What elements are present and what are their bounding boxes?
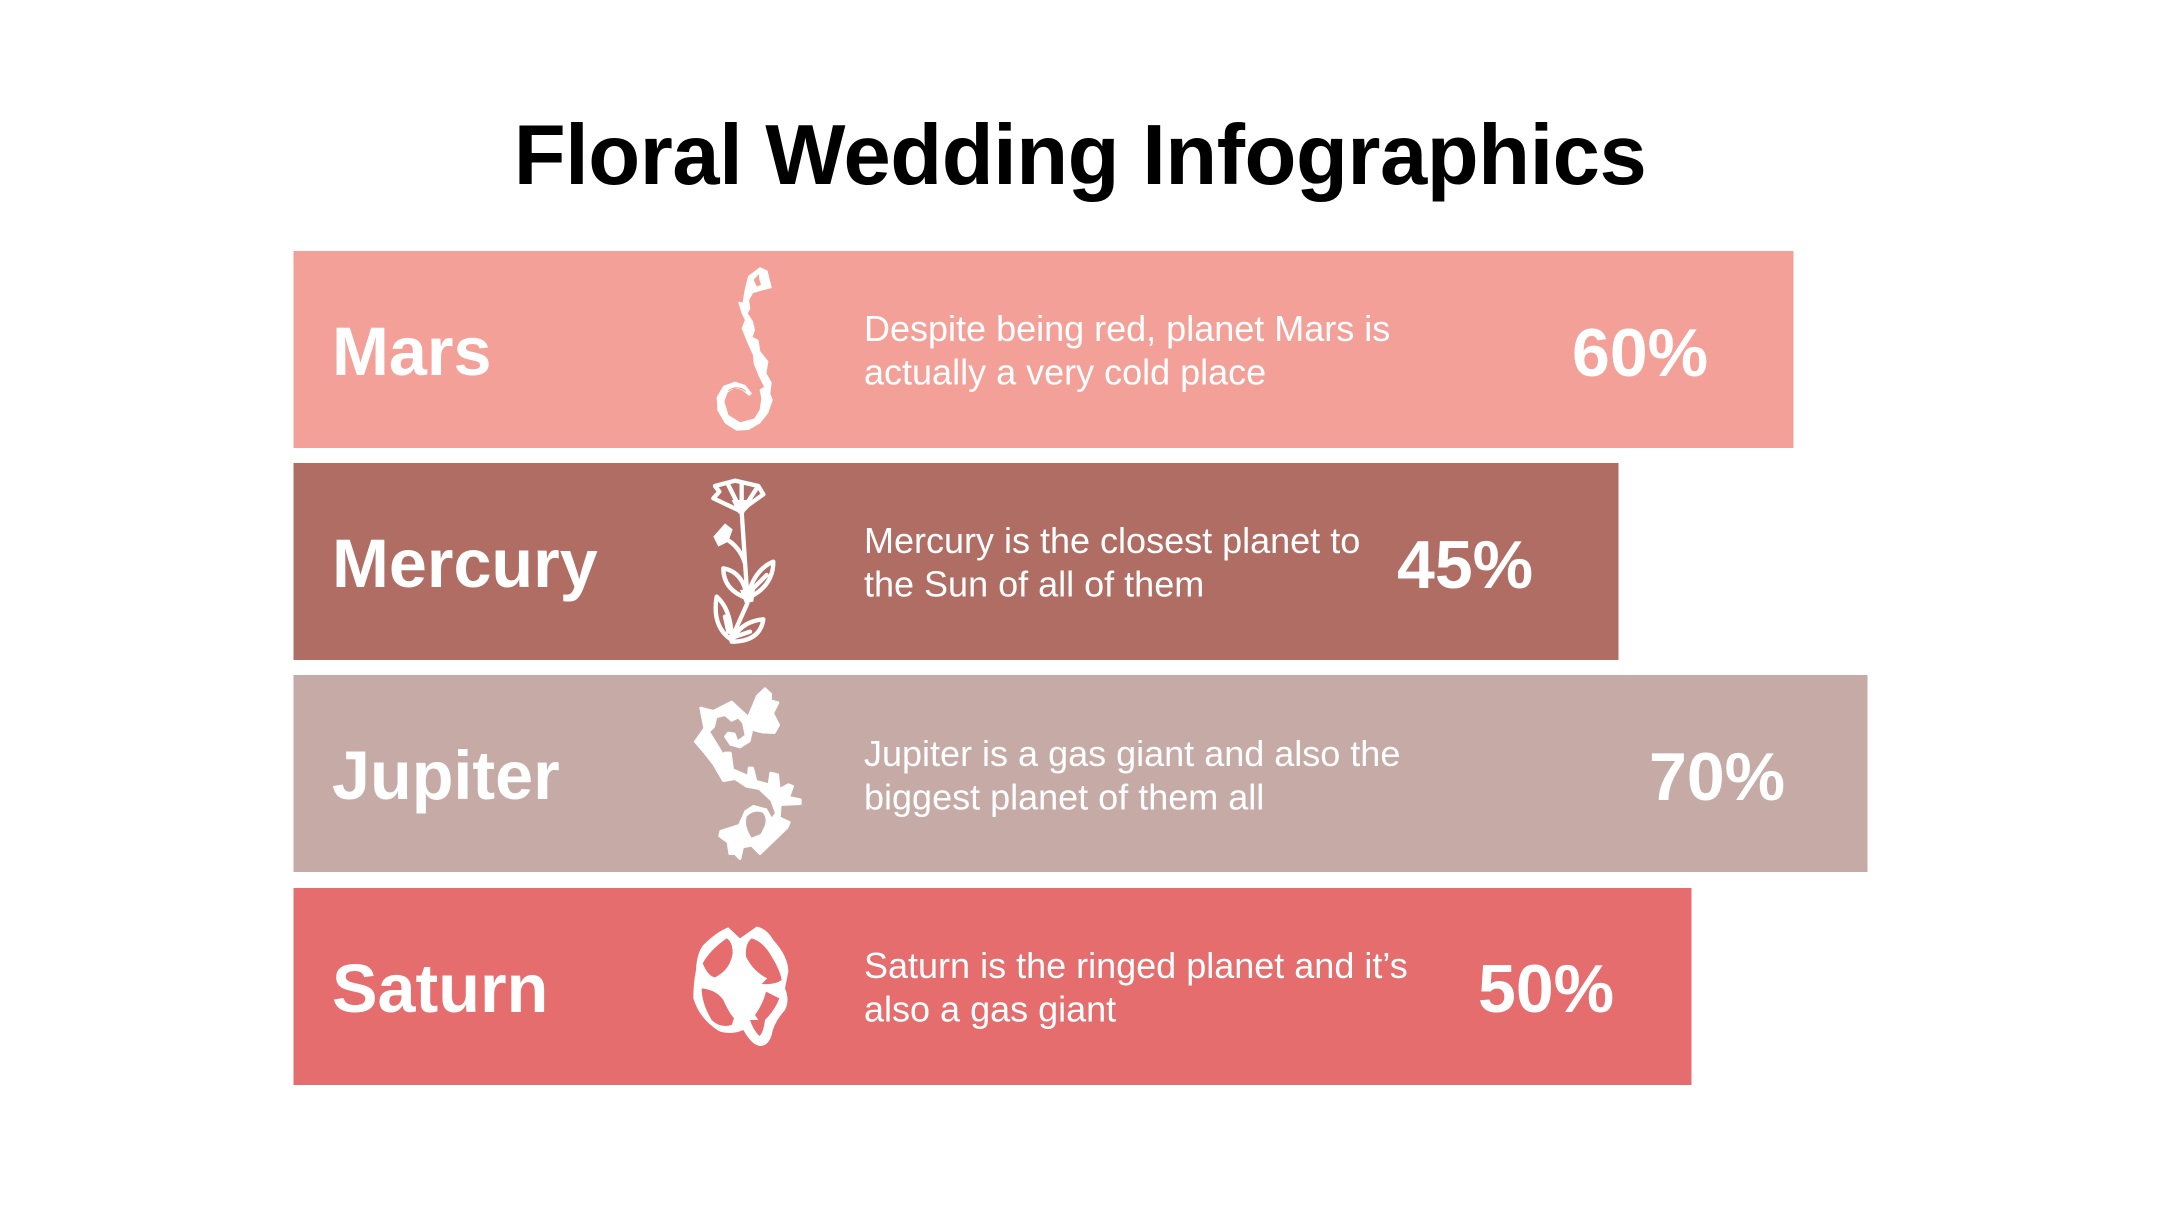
label: Mars: Mars	[332, 314, 491, 390]
description: Saturn: also a gas giant	[864, 988, 1116, 1030]
value: 60%: 60%	[1572, 315, 1708, 391]
description: Mercury: the Sun of all of them	[864, 564, 1204, 604]
value: 45%: 45%	[1397, 527, 1533, 603]
bar: Mars 60%	[294, 251, 1794, 448]
description: Saturn: Saturn is the ringed planet and it’s	[864, 945, 1408, 986]
panel: Saturn	[294, 888, 1692, 1085]
description: Mars: actually a very cold place	[864, 352, 1266, 392]
bar: Mercury 45%	[294, 463, 1618, 660]
label: Saturn: Saturn	[332, 951, 548, 1027]
label: Mercury: Mercury	[332, 526, 598, 602]
panel: Mars	[294, 251, 1794, 448]
panel: Jupiter	[294, 675, 1868, 872]
label: Jupiter: Jupiter	[332, 738, 560, 814]
icon: flower with leaves	[713, 481, 773, 642]
value: 50%: 50%	[1478, 951, 1614, 1027]
icon: flower blossom	[693, 927, 788, 1046]
description: Mars: Despite being red, planet Mars is	[864, 308, 1390, 349]
description: Jupiter: Jupiter is a gas giant and also the	[864, 733, 1400, 774]
panel: Mercury	[294, 463, 1618, 660]
value: 70%: 70%	[1649, 739, 1785, 815]
description: Mercury: Mercury is the closest planet to	[864, 520, 1360, 561]
description: Jupiter: biggest planet of them all	[864, 776, 1264, 818]
icon: floral vine	[695, 689, 800, 859]
title: Floral Wedding Infographics	[514, 108, 1646, 203]
bar: Saturn 50%	[294, 888, 1692, 1085]
icon: curled flower stem	[718, 268, 772, 430]
bar: Jupiter 70%	[294, 675, 1868, 872]
